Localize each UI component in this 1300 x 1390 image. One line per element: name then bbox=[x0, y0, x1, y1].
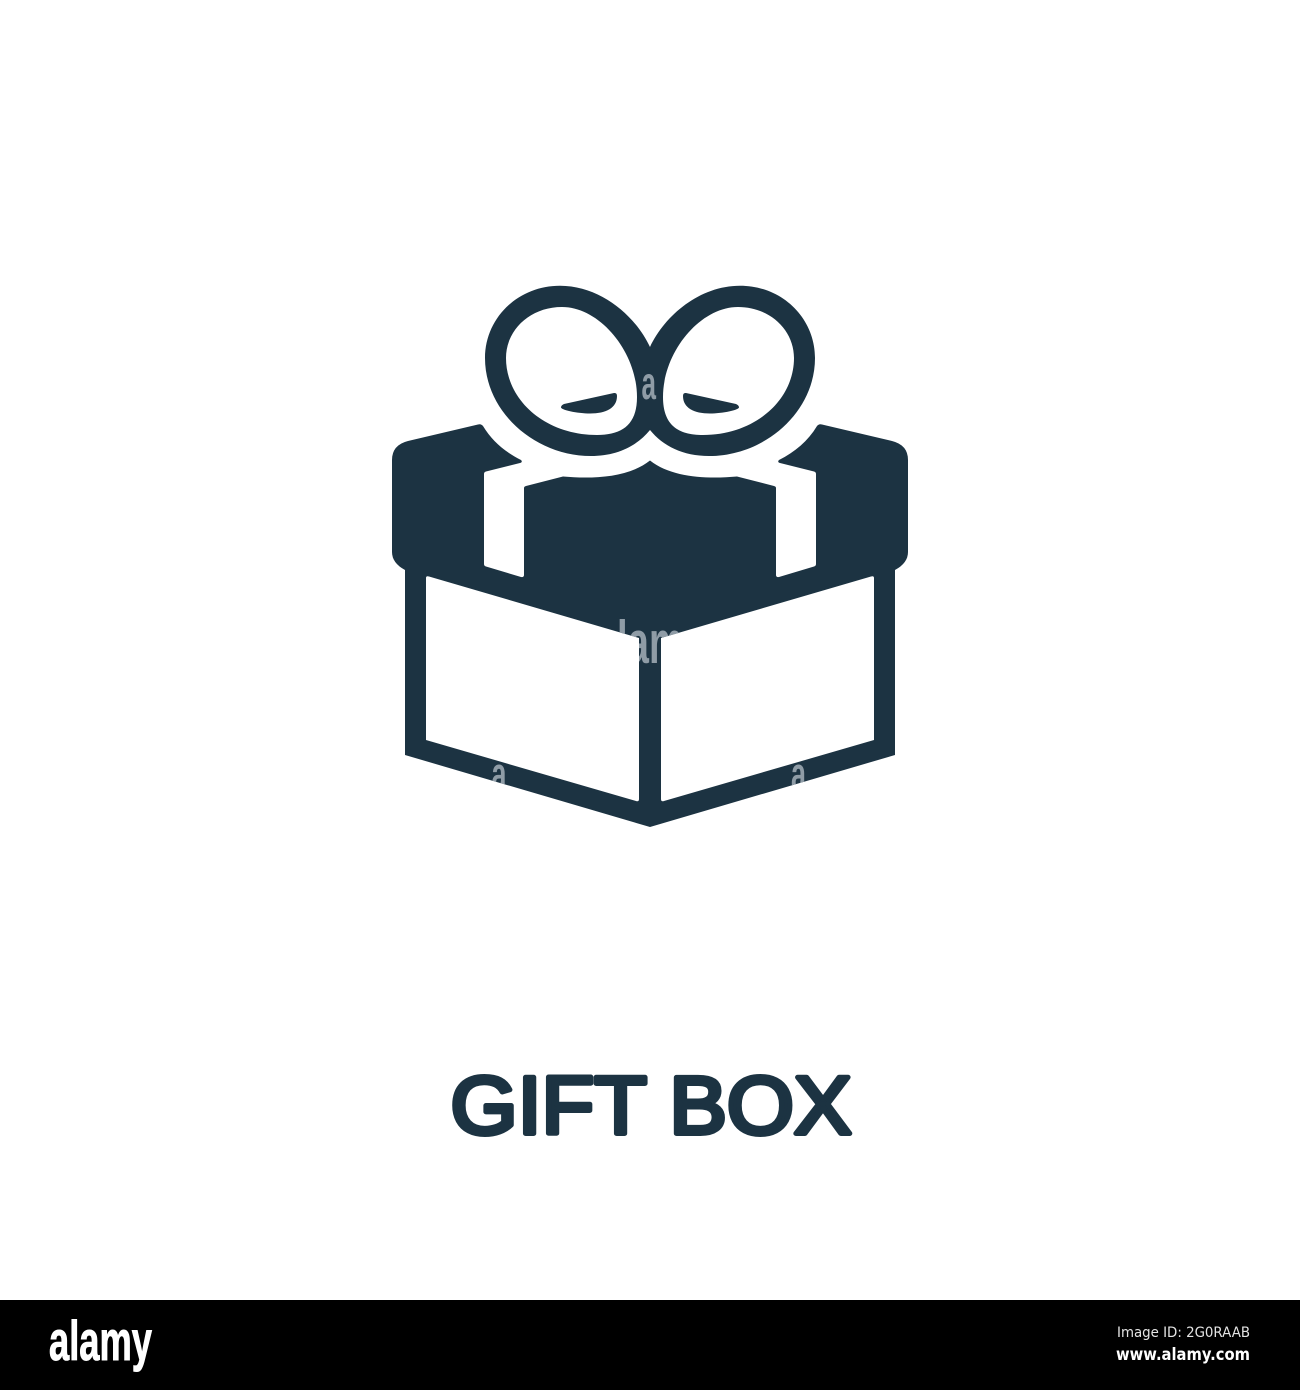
icon: lid and box body bbox=[392, 424, 908, 827]
icon: gift box bbox=[392, 286, 908, 827]
infographic canvas bbox=[0, 286, 1300, 1390]
watermark: centre letter on bow: a bbox=[642, 357, 656, 409]
icon: right box panel bbox=[661, 576, 874, 801]
watermark: lower left letter: a bbox=[492, 747, 507, 800]
footer website: www.alamy.com bbox=[1116, 1345, 1250, 1365]
footer logo: alamy bbox=[49, 1309, 152, 1372]
watermark: partial word on box: lam bbox=[617, 609, 683, 676]
icon: bow loops bbox=[485, 286, 815, 456]
footer bar bbox=[0, 1300, 1300, 1390]
title: GIFT BOX bbox=[450, 1060, 852, 1152]
footer image id: Image ID: 2G0RAAB bbox=[1117, 1325, 1250, 1341]
watermark: lower right letter: a bbox=[791, 747, 806, 800]
icon: left box panel bbox=[426, 576, 639, 801]
